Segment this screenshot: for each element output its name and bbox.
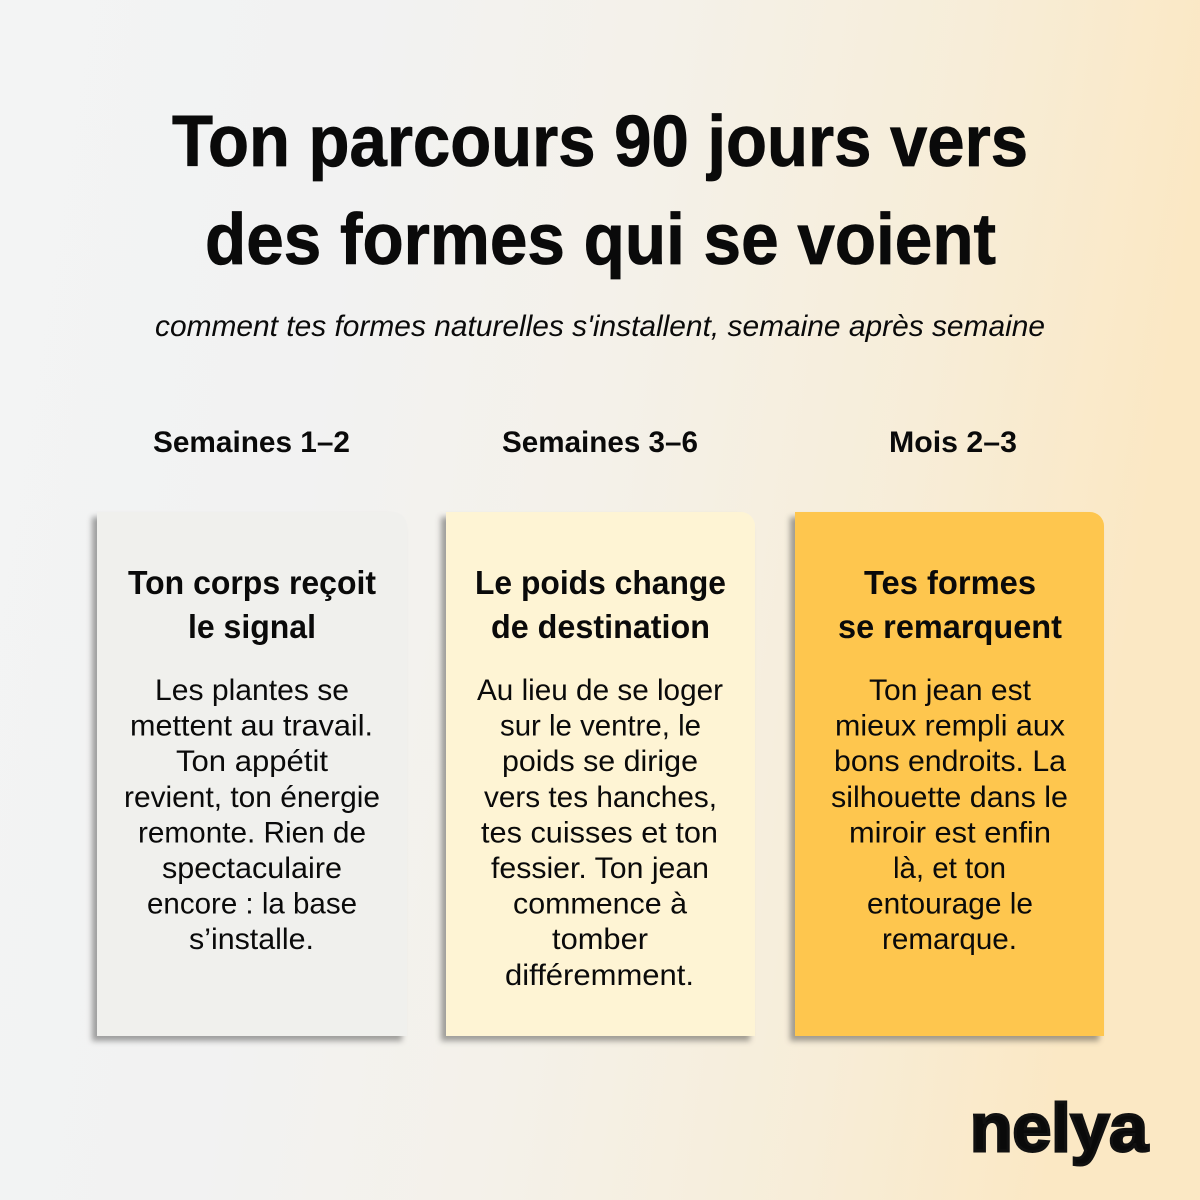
card background cream — [446, 512, 755, 1036]
card heading: se remarquent — [838, 608, 1062, 645]
card body text: tes cuisses et ton — [481, 816, 718, 849]
card body text — [477, 674, 723, 992]
column label: Semaines 1–2: Semaines 1–2 — [153, 426, 350, 459]
card heading: Tes formes — [864, 564, 1036, 601]
card heading — [128, 564, 376, 645]
card body text — [831, 674, 1068, 956]
card body text: encore : la base — [147, 888, 357, 921]
panel: semaines 1-2 — [97, 512, 407, 1036]
card body text: remarque. — [882, 923, 1017, 956]
title — [172, 102, 1028, 280]
card body text: s’installe. — [189, 923, 314, 956]
card body text: différemment. — [505, 959, 694, 992]
card body text: entourage le — [867, 888, 1033, 921]
card heading: de destination — [491, 608, 710, 645]
card heading — [838, 564, 1062, 645]
card background amber — [795, 512, 1104, 1036]
card body text: miroir est enfin — [849, 816, 1051, 849]
card body text: remonte. Rien de — [138, 816, 366, 849]
card body text: poids se dirige — [502, 745, 698, 778]
title: Ton parcours 90 jours vers — [172, 102, 1028, 182]
subtitle: comment tes formes naturelles s'installent, semaine après semaine — [155, 310, 1045, 343]
card body text: bons endroits. La — [834, 745, 1066, 778]
card body text: sur le ventre, le — [500, 710, 701, 743]
card heading: Le poids change — [475, 564, 726, 601]
card body text: commence à — [513, 888, 687, 921]
panel: mois 2-3 — [795, 512, 1104, 1036]
card body text: Au lieu de se loger — [477, 674, 723, 707]
card body text: revient, ton énergie — [124, 781, 380, 814]
logo: nelya: nelya — [970, 1090, 1149, 1166]
column label: Mois 2–3: Mois 2–3 — [889, 426, 1017, 459]
card body text: vers tes hanches, — [484, 781, 717, 814]
card heading: Ton corps reçoit — [128, 564, 376, 601]
card body text: là, et ton — [893, 852, 1006, 885]
card body text — [124, 674, 380, 956]
card heading: le signal — [188, 608, 316, 645]
card body text: mettent au travail. — [130, 710, 373, 743]
card background grey — [97, 512, 407, 1036]
card body text: silhouette dans le — [831, 781, 1068, 814]
card body text: fessier. Ton jean — [491, 852, 709, 885]
card body text: spectaculaire — [162, 852, 342, 885]
card heading — [475, 564, 726, 645]
panel: semaines 3-6 — [446, 512, 755, 1036]
title: des formes qui se voient — [205, 200, 996, 280]
card body text: Ton appétit — [176, 745, 329, 778]
card body text: tomber — [552, 923, 648, 956]
card body text: Les plantes se — [155, 674, 349, 707]
card body text: mieux rempli aux — [835, 710, 1065, 743]
card body text: Ton jean est — [869, 674, 1032, 707]
column label: Semaines 3–6: Semaines 3–6 — [502, 426, 698, 459]
